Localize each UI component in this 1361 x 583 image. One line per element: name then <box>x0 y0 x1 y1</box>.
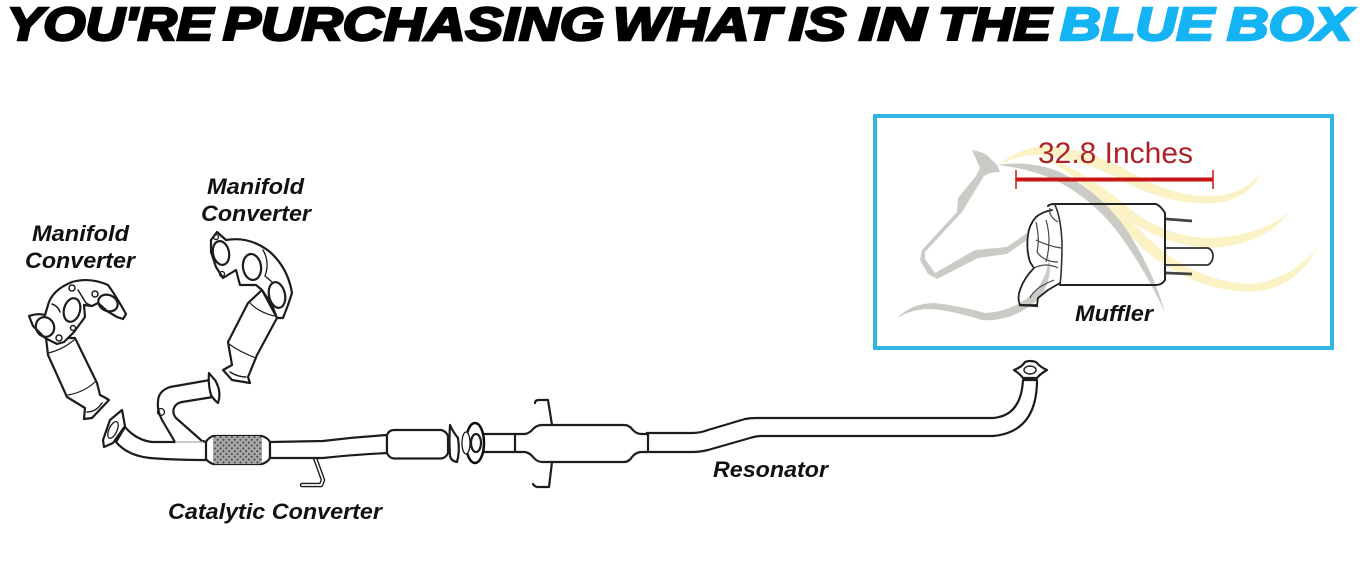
label: left manifold converter <box>25 221 137 273</box>
label: right manifold converter: Manifold <box>207 174 305 199</box>
label: left manifold converter: Converter <box>25 248 137 273</box>
label: dimension: 32.8 Inches <box>1038 137 1193 170</box>
left manifold converter <box>29 280 126 419</box>
icon: yellow mane streaks <box>999 146 1317 292</box>
title <box>7 0 1355 50</box>
label: catalytic converter: Catalytic Converter <box>168 499 384 524</box>
dimension bar <box>1016 170 1213 189</box>
resonator pipe <box>462 361 1047 487</box>
label: left manifold converter: Manifold <box>32 221 130 246</box>
right manifold converter <box>211 232 292 383</box>
label: resonator: Resonator <box>713 457 830 482</box>
label: right manifold converter <box>201 174 313 226</box>
icon: muffler <box>1018 204 1213 306</box>
panel: blue box <box>875 116 1332 348</box>
label: muffler: Muffler <box>1075 301 1155 326</box>
icon: grey horse outline <box>897 150 1165 320</box>
label: right manifold converter: Converter <box>201 201 313 226</box>
catalytic converter pipe <box>103 373 459 485</box>
